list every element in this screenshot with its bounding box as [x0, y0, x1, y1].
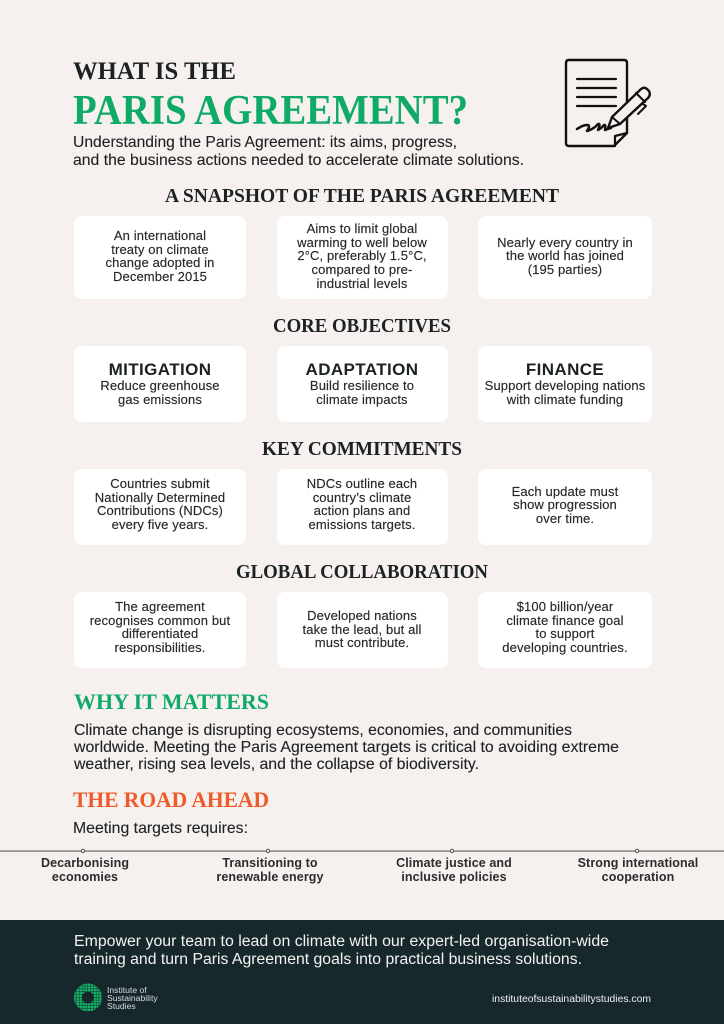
- timeline: [0, 849, 724, 853]
- card: aims: industrial levels: [317, 276, 408, 291]
- card: NDC outline: country’s climate: [313, 490, 411, 505]
- timeline label: climate justice: inclusive policies: [401, 870, 507, 884]
- card: treaty: December 2015: [113, 269, 207, 284]
- card: responsibilities: differentiated: [122, 626, 198, 641]
- card: treaty: change adopted in: [105, 255, 215, 270]
- card: treaty: treaty on climate: [111, 242, 209, 257]
- card: mitigation: [74, 346, 246, 422]
- heading: the road ahead: THE ROAD AHEAD: [73, 787, 269, 812]
- card: parties: Nearly every country in: [497, 235, 633, 250]
- heading: global collaboration: GLOBAL COLLABORATION: [236, 562, 488, 583]
- card: developed nations: must contribute.: [315, 635, 409, 650]
- timeline label: climate justice: [396, 856, 512, 884]
- card: NDC submission: every five years.: [112, 517, 208, 532]
- card: progression: Each update must: [512, 484, 619, 499]
- heading: snapshot: A SNAPSHOT OF THE PARIS AGREEMENT: [165, 186, 559, 207]
- website: instituteofsustainabilitystudies.com: [492, 993, 651, 1005]
- footer call to action: Empower your team to lead on climate with our expert-led organisation-wide: [74, 933, 609, 950]
- text block: why it matters: Climate change is disrupting ecosystems, economies, and communities: [74, 722, 572, 739]
- logo: Sustainability: [107, 993, 158, 1003]
- card: mitigation: Reduce greenhouse: [100, 378, 220, 393]
- card: parties: [478, 216, 652, 299]
- card: finance: Support developing nations: [485, 378, 646, 393]
- card: adaptation: climate impacts: [316, 392, 408, 407]
- heading: why it matters: WHY IT MATTERS: [74, 689, 269, 714]
- card: climate finance: $100 billion/year: [517, 599, 614, 614]
- card: responsibilities: recognises common but: [90, 613, 231, 628]
- footer call to action: training and turn Paris Agreement goals into practical business solutions.: [74, 951, 582, 968]
- card: NDC outline: emissions targets.: [309, 517, 415, 532]
- card: NDC submission: Contributions (NDCs): [97, 503, 223, 518]
- subtitle: [73, 134, 524, 169]
- card: NDC outline: action plans and: [314, 503, 410, 518]
- logo: Studies: [107, 1001, 136, 1011]
- card: NDC submission: [74, 469, 246, 545]
- text block: why it matters: worldwide. Meeting the Paris Agreement targets is critical to avoiding extreme: [73, 739, 619, 756]
- card: developed nations: take the lead, but all: [302, 622, 422, 637]
- timeline label: climate justice: Climate justice and: [396, 856, 512, 870]
- card: parties: the world has joined: [506, 248, 624, 263]
- card: NDC submission: Countries submit: [110, 476, 210, 491]
- text block: why it matters: weather, rising sea levels, and the collapse of biodiversity.: [73, 756, 479, 773]
- timeline label: cooperation: Strong international: [578, 856, 698, 870]
- card: responsibilities: responsibilities.: [115, 640, 205, 655]
- card: NDC submission: Nationally Determined: [95, 490, 225, 505]
- title: PARIS AGREEMENT?: [73, 88, 468, 134]
- timeline label: decarbonising: economies: [52, 870, 118, 884]
- heading: key commitments: KEY COMMITMENTS: [262, 439, 462, 460]
- subtitle: Understanding the Paris Agreement: its aims, progress,: [73, 134, 457, 151]
- timeline label: cooperation: [578, 856, 698, 884]
- card: aims: 2°C, preferably 1.5°C,: [297, 248, 427, 263]
- text block: why it matters: [73, 722, 619, 773]
- logo: [78, 985, 158, 1011]
- timeline label: decarbonising: Decarbonising: [41, 856, 129, 870]
- subtitle: and the business actions needed to accelerate climate solutions.: [73, 152, 524, 169]
- card: adaptation: [277, 346, 448, 422]
- title: [73, 58, 468, 134]
- card: responsibilities: [74, 592, 246, 668]
- card: parties: (195 parties): [528, 262, 602, 277]
- card: progression: [478, 469, 652, 545]
- footer call to action: [74, 933, 609, 968]
- card: progression: show progression: [513, 497, 617, 512]
- card: climate finance: developing countries.: [502, 640, 628, 655]
- card: adaptation: ADAPTATION: [306, 360, 418, 379]
- timeline label: renewable energy: renewable energy: [216, 870, 324, 884]
- card: responsibilities: The agreement: [115, 599, 205, 614]
- card: progression: over time.: [536, 511, 594, 526]
- card: aims: Aims to limit global: [307, 221, 417, 236]
- card: finance: [478, 346, 652, 422]
- card: finance: FINANCE: [526, 360, 604, 379]
- card: developed nations: [277, 592, 448, 668]
- timeline label: decarbonising: [41, 856, 129, 884]
- logo: Institute of: [107, 985, 147, 995]
- footer panel: [0, 920, 724, 1024]
- card: treaty: [74, 216, 246, 299]
- timeline label: renewable energy: Transitioning to: [222, 856, 318, 870]
- card: treaty: An international: [114, 228, 206, 243]
- card: climate finance: [478, 592, 652, 668]
- card: climate finance: climate finance goal: [506, 613, 624, 628]
- card: aims: [277, 216, 448, 299]
- card: adaptation: Build resilience to: [310, 378, 414, 393]
- card: finance: with climate funding: [506, 392, 623, 407]
- card: NDC outline: NDCs outline each: [307, 476, 417, 491]
- icon: signed document with pen: [566, 60, 650, 146]
- card: aims: warming to well below: [296, 235, 427, 250]
- card: developed nations: Developed nations: [307, 608, 417, 623]
- card: aims: compared to pre-: [312, 262, 412, 277]
- card: mitigation: gas emissions: [118, 392, 202, 407]
- card: climate finance: to support: [535, 626, 595, 641]
- text block: meeting targets: Meeting targets requires:: [73, 820, 248, 837]
- heading: core objectives: CORE OBJECTIVES: [273, 316, 451, 337]
- timeline label: renewable energy: [216, 856, 324, 884]
- timeline label: cooperation: cooperation: [602, 870, 674, 884]
- title: WHAT IS THE: [73, 58, 236, 85]
- card: NDC outline: [277, 469, 448, 545]
- card: mitigation: MITIGATION: [109, 360, 211, 379]
